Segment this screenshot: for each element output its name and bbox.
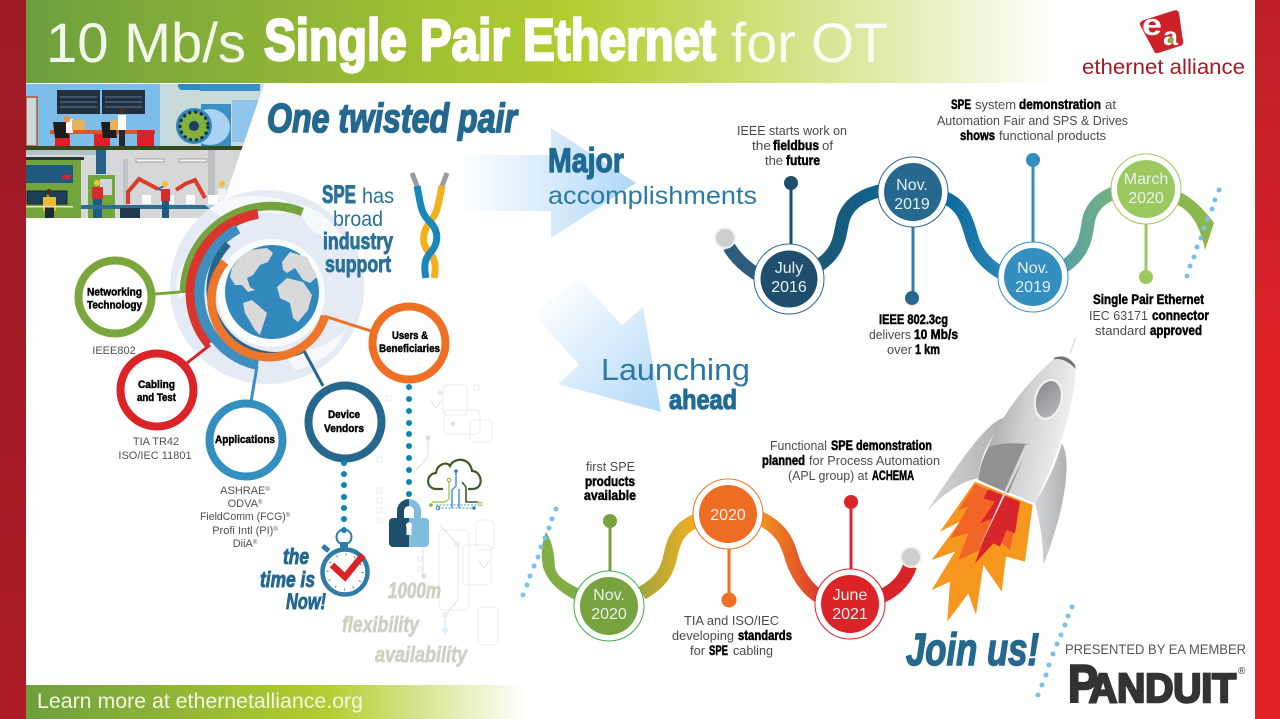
dotted line: users: [406, 384, 412, 497]
text: SPE system demonstration: system: [975, 98, 1016, 112]
text: IEEE 802.3cg: 1 km: [915, 342, 940, 357]
milestone: Nov. 2020: 2020: [591, 606, 627, 623]
left red band: [0, 0, 26, 719]
text: Single Pair Ethernet connector: approved: [1150, 323, 1202, 338]
right red band: [1255, 0, 1280, 719]
text: Single Pair Ethernet connector: standard: [1095, 324, 1146, 338]
logo: ethernet alliance: ethernet alliance: [1082, 56, 1245, 79]
heading: launching ahead: [601, 352, 750, 415]
text: SPE system demonstration: SPE: [951, 97, 971, 112]
text: SPE has broad industry support: SPE: [322, 181, 356, 209]
text: IEEE 802.3cg: 10 Mb/s: [914, 327, 958, 342]
category: applications: ASHRAE: [220, 485, 265, 497]
milestone: June 2021: June: [833, 587, 867, 604]
text: IEEE starts work: IEEE starts work on: [737, 124, 847, 138]
text: TIA and ISO/IEC standards: [672, 614, 792, 658]
text: first SPE products available: first SPE: [586, 460, 635, 474]
text: functional SPE demonstration: planned: [762, 453, 805, 468]
milestone: 2020: 2020: [710, 507, 746, 524]
text: Single Pair Ethernet connector: Single Pair Ethernet: [1093, 292, 1204, 307]
text: functional SPE demonstration: for Process Automation: [809, 454, 940, 468]
text: SPE has broad industry support: support: [325, 251, 391, 277]
dotted line: device vendors: [341, 460, 347, 533]
text: IEEE starts work: fieldbus: [773, 138, 819, 153]
category: applications: DiiA: [233, 538, 253, 550]
category: networking technology: Technology: [87, 300, 143, 312]
presented by Panduit: [1065, 641, 1246, 714]
category: networking technology: [78, 260, 152, 357]
stems and dots: [603, 495, 858, 608]
stems and dots: [784, 153, 1153, 305]
text: functional SPE demonstration: ACHEMA: [872, 468, 914, 483]
category: networking technology: Networking: [87, 286, 142, 298]
milestone: Nov. 2019 second: [998, 242, 1068, 312]
icon: cloud circuit: [428, 460, 482, 510]
milestone: Nov. 2020: [574, 571, 644, 641]
logo: ethernet alliance: e: [1142, 7, 1162, 42]
connector lines: [155, 292, 371, 402]
dotted line: join us: [1036, 604, 1074, 698]
footer text: Learn more at ethernetalliance.org: [37, 690, 363, 713]
category: applications: ®: [265, 486, 270, 493]
category: cabling and test: TIA TR42: [133, 436, 179, 448]
text: Single Pair Ethernet connector: [1089, 292, 1210, 338]
milestone: Nov. 2020: Nov.: [593, 587, 625, 604]
milestone: Nov. 2019: [878, 157, 948, 227]
text: SPE system demonstration: Automation Fair and SPS & Drives: [937, 114, 1128, 128]
text: SPE system demonstration: shows: [960, 128, 995, 143]
text: functional SPE demonstration: Functional: [770, 439, 827, 453]
end ball: [901, 547, 921, 567]
text: SPE has broad industry support: industry: [323, 228, 393, 254]
text: the time is now: time is: [260, 567, 315, 592]
text: the time is now: the: [283, 544, 309, 569]
text: TIA and ISO/IEC standards: for: [690, 644, 705, 658]
panel: industry support globe: [155, 190, 371, 402]
title: for OT: [731, 11, 888, 74]
milestone: July 2016: 2016: [771, 279, 807, 296]
icon: twisted pair wires: [412, 173, 447, 278]
text: first SPE products available: available: [584, 488, 636, 503]
milestone: June 2021: [815, 569, 885, 639]
text: first SPE products available: products: [585, 474, 635, 489]
factory illustration: [26, 84, 266, 218]
category: cabling and test: [118, 354, 194, 462]
text: TIA and ISO/IEC standards: TIA and ISO/IEC: [684, 614, 779, 628]
presented by Panduit: ®: [1238, 666, 1246, 677]
logo: ethernet alliance: [1082, 7, 1245, 79]
title: Single Pair Ethernet: [264, 8, 716, 73]
heading: one twisted pair: One twisted pair: [267, 95, 519, 141]
heading: join us: Join us!: [906, 624, 1039, 675]
text: SPE has broad industry support: has: [362, 185, 394, 208]
header banner: [26, 0, 1060, 83]
text: IEEE starts work: the: [765, 154, 783, 168]
presented by Panduit: ANDUIT: [1089, 665, 1236, 711]
heading: launching ahead: ahead: [669, 384, 737, 415]
category: applications: ®: [286, 512, 291, 519]
milestone: Nov. 2019: Nov.: [896, 177, 928, 194]
text: 1000m flexibility availability: flexibility: [342, 612, 420, 637]
ribbon: [729, 190, 1214, 281]
icon: padlock: [389, 499, 429, 547]
milestone: July 2016: [754, 244, 824, 314]
text: SPE system demonstration: at: [1105, 98, 1117, 112]
text: IEEE starts work: [737, 124, 847, 168]
text: the time is now: [260, 544, 326, 614]
text: TIA and ISO/IEC standards: cabling: [733, 644, 773, 658]
text: IEEE starts work: future: [786, 153, 820, 168]
text: IEEE 802.3cg: IEEE 802.3cg: [879, 312, 948, 327]
text: the time is now: Now!: [286, 589, 326, 614]
arrow: launching ahead: [533, 278, 661, 412]
text: SPE system demonstration: [937, 97, 1128, 143]
milestone: Nov. 2019: 2019: [894, 196, 930, 213]
category: applications: Applications: [215, 434, 275, 446]
presented by Panduit: P: [1068, 655, 1098, 714]
category: device vendors: Device: [328, 409, 360, 421]
category: networking technology: IEEE802: [92, 345, 136, 357]
concentric arcs: [184, 206, 325, 365]
milestone: March 2020: [1111, 154, 1181, 224]
text: IEEE starts work: of: [822, 139, 834, 153]
category: applications: ®: [253, 539, 258, 546]
category: users and beneficiaries: Beneficiaries: [379, 343, 440, 355]
category: cabling and test: and Test: [137, 392, 176, 404]
faint circuit pattern background: [377, 385, 498, 645]
icon: rocket: [927, 338, 1076, 622]
milestone: July 2016: July: [775, 260, 803, 277]
timeline: launching ahead: [542, 438, 940, 658]
category: device vendors: Vendors: [324, 423, 364, 435]
text: Single Pair Ethernet connector: IEC 63171: [1089, 309, 1148, 323]
text: TIA and ISO/IEC standards: standards: [738, 628, 792, 643]
heading: launching ahead: Launching: [601, 352, 750, 387]
dotted line: bottom timeline start: [520, 506, 558, 598]
milestone: March 2020: March: [1124, 171, 1168, 188]
text: SPE system demonstration: demonstration: [1019, 97, 1101, 112]
category: applications: ®: [273, 526, 278, 533]
text: TIA and ISO/IEC standards: SPE: [709, 643, 728, 658]
text: IEEE starts work: the: [752, 139, 771, 153]
heading: major accomplishments: accomplishments: [548, 182, 757, 210]
timeline: major accomplishments: [715, 97, 1214, 357]
milestone: Nov. 2019 second: Nov.: [1017, 260, 1049, 277]
start ball: [715, 228, 735, 248]
presented by Panduit: PRESENTED BY EA MEMBER: [1065, 641, 1246, 657]
category: applications: ODVA: [228, 498, 258, 510]
text: SPE has broad industry support: broad: [333, 208, 383, 231]
category: users and beneficiaries: [372, 306, 446, 380]
text: 1000m flexibility availability: 1000m: [388, 578, 441, 603]
text: Single Pair Ethernet connector: connector: [1152, 308, 1210, 323]
logo: ethernet alliance: a: [1163, 21, 1179, 51]
category: device vendors: [308, 386, 382, 458]
footer banner: [26, 685, 526, 719]
text: first SPE products available: [584, 460, 636, 503]
category: applications: [200, 404, 291, 550]
ribbon: [542, 518, 910, 600]
heading: major accomplishments: [548, 142, 757, 210]
category: cabling and test: ISO/IEC 11801: [118, 450, 192, 462]
text: 1000m flexibility availability: [342, 578, 468, 667]
title: 10 Mb/s: [46, 11, 246, 74]
text: IEEE 802.3cg: delivers: [869, 328, 911, 342]
text: SPE system demonstration: functional products: [999, 129, 1106, 143]
title: [46, 8, 888, 74]
category: applications: FieldComm (FCG): [200, 511, 290, 523]
heading: major accomplishments: Major: [548, 142, 624, 180]
text: 1000m flexibility availability: availability: [375, 642, 468, 667]
milestone: Nov. 2019 second: 2019: [1015, 279, 1051, 296]
text: functional SPE demonstration: [762, 438, 940, 483]
milestone: June 2021: 2021: [832, 606, 868, 623]
text: IEEE 802.3cg: over: [887, 343, 912, 357]
icon: stopwatch with check: [321, 530, 368, 594]
arrow: major accomplishments: [455, 128, 636, 238]
category: cabling and test: Cabling: [138, 379, 175, 391]
milestone: March 2020: 2020: [1128, 190, 1164, 207]
globe: [225, 245, 319, 339]
category: users and beneficiaries: Users &: [392, 330, 428, 342]
dotted line: top timeline end: [1184, 188, 1222, 278]
milestone: 2020: [693, 479, 763, 549]
category: applications: ®: [258, 499, 263, 506]
pale world backdrop: [170, 190, 364, 384]
text: IEEE 802.3cg: [869, 312, 958, 357]
text: functional SPE demonstration: SPE demonstration: [831, 438, 932, 453]
text: TIA and ISO/IEC standards: developing: [672, 629, 734, 643]
category: applications: Profi Intl (PI): [212, 525, 273, 537]
text: SPE has broad industry support: [322, 181, 394, 277]
text: functional SPE demonstration: (APL group) at: [788, 469, 869, 483]
